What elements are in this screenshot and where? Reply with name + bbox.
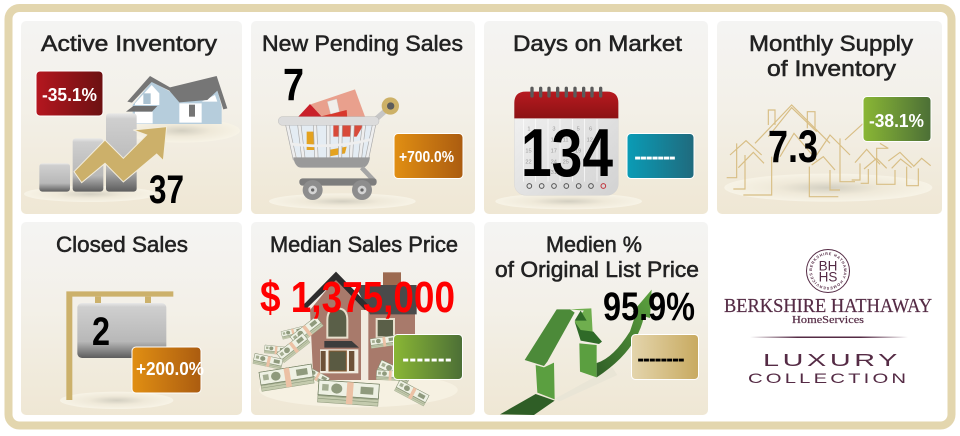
icon: calendar [495,88,642,209]
icon: calendar: 15 [525,149,532,155]
icon: calendar: 3 [552,127,555,133]
panel: median percent of original list price [484,222,708,415]
heading: active inventory: Active Inventory [41,31,217,56]
badge: no change, gold: -------- [638,351,684,368]
heading: median percent of original list price: of Original List Price [495,257,699,282]
heading: median percent of original list price: Medien % [546,232,642,257]
value: 2: 2 [92,310,110,354]
logo seal: BHHS: BERKSHIRE HATHAWAY HOMESERVICES [809,252,847,290]
icon: hanging sign [60,291,173,409]
value: 37: 37 [149,168,184,212]
icon: calendar: 29 [525,170,532,176]
badge: no change, green: ------- [403,351,451,368]
value: $ 1,375,000: $ 1,375,000 [260,273,455,322]
heading: monthly supply of inventory: of Inventory [767,56,896,81]
logo: collection: COLLECTION [748,370,906,386]
badge: no change, teal: ------- [635,149,675,166]
icon: calendar: 19 [575,149,581,155]
panel: new pending sales [251,21,475,214]
icon: outlined gold houses [724,105,932,202]
badge: no change, gold [632,334,698,380]
badge: +200.0%: +200.0% [136,359,204,379]
panel: median sales price [251,222,475,415]
badge: +700.0%: +700.0% [399,149,454,166]
heading: monthly supply of inventory: Monthly Supply [749,31,913,56]
value: 7: 7 [283,59,304,110]
logo: luxury: LUXURY [763,350,897,370]
icon: calendar: 24 [551,159,557,165]
icon: calendar: 11 [563,138,569,144]
heading: median sales price: Median Sales Price [270,232,458,257]
logo: berkshire hathaway homeservices luxury collection [724,249,932,386]
badge: +200.0% [132,347,204,393]
logo sub-brand: HomeServices [792,314,864,326]
logo seal: BHHS: BH [819,258,837,274]
icon: brick house with money [253,272,458,407]
icon: calendar: 25 [563,159,569,165]
icon: calendar: 10 [551,138,557,144]
logo wordmark: BERKSHIRE HATHAWAY [724,295,932,317]
panel: closed sales [21,222,242,415]
heading: days on market: Days on Market [513,31,682,56]
icon: calendar: 17 [551,149,557,155]
badge: -38.1%: -38.1% [869,111,924,131]
value: 7.3: 7.3 [768,121,818,172]
icon: calendar: 31 [551,170,557,176]
badge: no change, teal [627,134,694,178]
logo seal: BHHS: HS [819,270,837,284]
heading: closed sales: Closed Sales [56,232,188,257]
icon: house and rising bars [24,76,240,202]
icon: calendar: 1 [527,127,530,133]
icon: calendar: 6 [589,127,592,133]
value: 95.9%: 95.9% [603,285,695,329]
icon: green ribbon house arrow [500,290,652,415]
badge: -35.1% [36,71,103,116]
panel: monthly supply of inventory [717,21,942,214]
panel: days on market [484,21,708,214]
icon: shopping cart with house [269,89,416,209]
heading: new pending sales: New Pending Sales [262,31,463,56]
icon: calendar: 5 [577,127,580,133]
panel: active inventory [21,21,242,214]
badge: -38.1% [863,96,931,142]
badge: +700.0% [394,134,463,178]
icon: calendar: 22 [525,159,532,165]
value: 134: 134 [521,115,613,191]
icon: calendar: 12 [587,138,593,144]
badge: no change, green [394,334,462,380]
badge: -35.1%: -35.1% [42,85,97,105]
